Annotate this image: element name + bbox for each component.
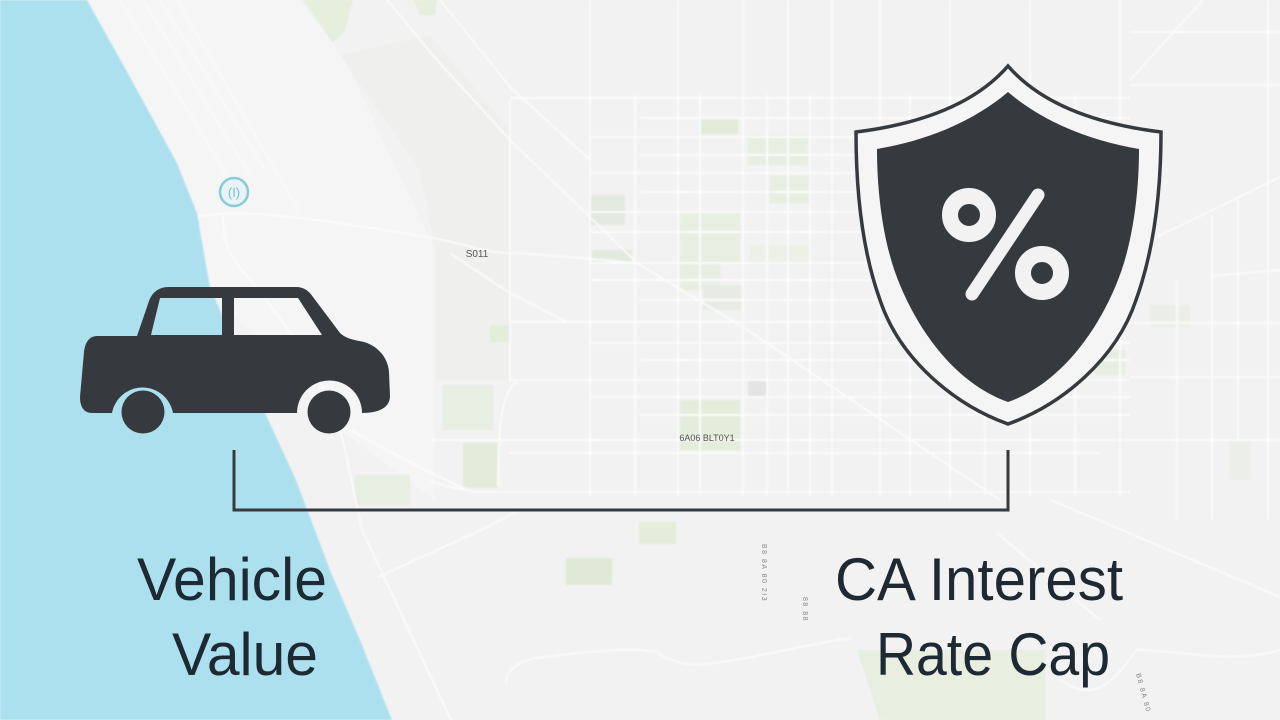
shield inner (877, 92, 1139, 402)
connector bracket (234, 450, 1008, 510)
map label: vertical street one: B8 8A 80 2I3 (760, 544, 767, 602)
label: CA interest rate cap (835, 546, 1123, 688)
map label: vertical street two: 88 88 (801, 597, 808, 622)
label: vehicle value: Vehicle (137, 546, 327, 613)
label: vehicle value (137, 546, 327, 688)
car rear wheel (122, 390, 164, 434)
map pin icon: (I) (228, 185, 240, 200)
label: CA interest rate cap: Rate Cap (876, 621, 1110, 688)
car front wheel (308, 390, 350, 434)
map label: vertical street three: B8 8A 80 (1134, 673, 1151, 714)
icon: car (80, 287, 390, 434)
map label: district: 6A06 BLT0Y1 (679, 433, 735, 443)
map label: street: S011 (466, 249, 489, 260)
coastline water (0, 0, 392, 720)
label: vehicle value: Value (172, 621, 318, 688)
shield outer (856, 66, 1161, 424)
percent sign (950, 195, 1061, 294)
icon: shield with percent (856, 66, 1161, 424)
map pin icon (220, 178, 248, 206)
label: CA interest rate cap: CA Interest (835, 546, 1123, 613)
